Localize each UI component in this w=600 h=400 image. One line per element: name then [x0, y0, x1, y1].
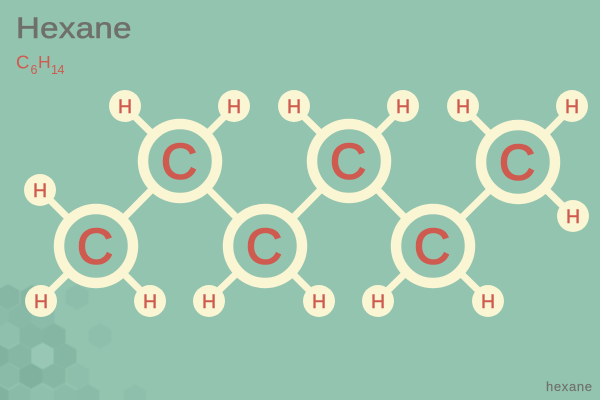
hydrogen labels: H: [481, 291, 495, 313]
hydrogen labels: H: [227, 96, 241, 118]
carbon labels: C: [161, 134, 197, 190]
chemical formula: H: [38, 52, 51, 72]
hydrogen labels: H: [566, 206, 580, 228]
hydrogen labels: H: [371, 291, 385, 313]
molecule structure: [24, 90, 589, 317]
hydrogen labels: H: [456, 96, 470, 118]
hydrogen atoms: [24, 90, 589, 317]
carbon labels: C: [330, 134, 366, 190]
hydrogen labels: H: [202, 291, 216, 313]
carbon atoms: [59, 124, 555, 283]
chemical formula: [16, 52, 65, 77]
chemical formula: 6: [30, 63, 38, 77]
hydrogen labels: H: [118, 96, 132, 118]
carbon labels: C: [414, 218, 450, 274]
carbon labels: C: [77, 218, 113, 274]
carbon labels: C: [246, 218, 282, 274]
hydrogen labels: H: [565, 96, 579, 118]
hydrogen labels: H: [287, 96, 301, 118]
bonds: [41, 107, 573, 300]
caption: hexane: [546, 379, 592, 394]
chemical formula: C: [16, 52, 29, 72]
hydrogen labels: H: [312, 291, 326, 313]
hydrogen labels: H: [34, 291, 48, 313]
title: Hexane: [16, 10, 131, 45]
carbon labels: C: [499, 134, 535, 190]
chemical formula: 14: [51, 63, 65, 77]
carbon labels: [77, 134, 535, 274]
hydrogen labels: [33, 96, 580, 313]
hydrogen labels: H: [143, 291, 157, 313]
hexagon background pattern: [0, 284, 146, 400]
hydrogen labels: H: [396, 96, 410, 118]
hydrogen labels: H: [33, 180, 47, 202]
